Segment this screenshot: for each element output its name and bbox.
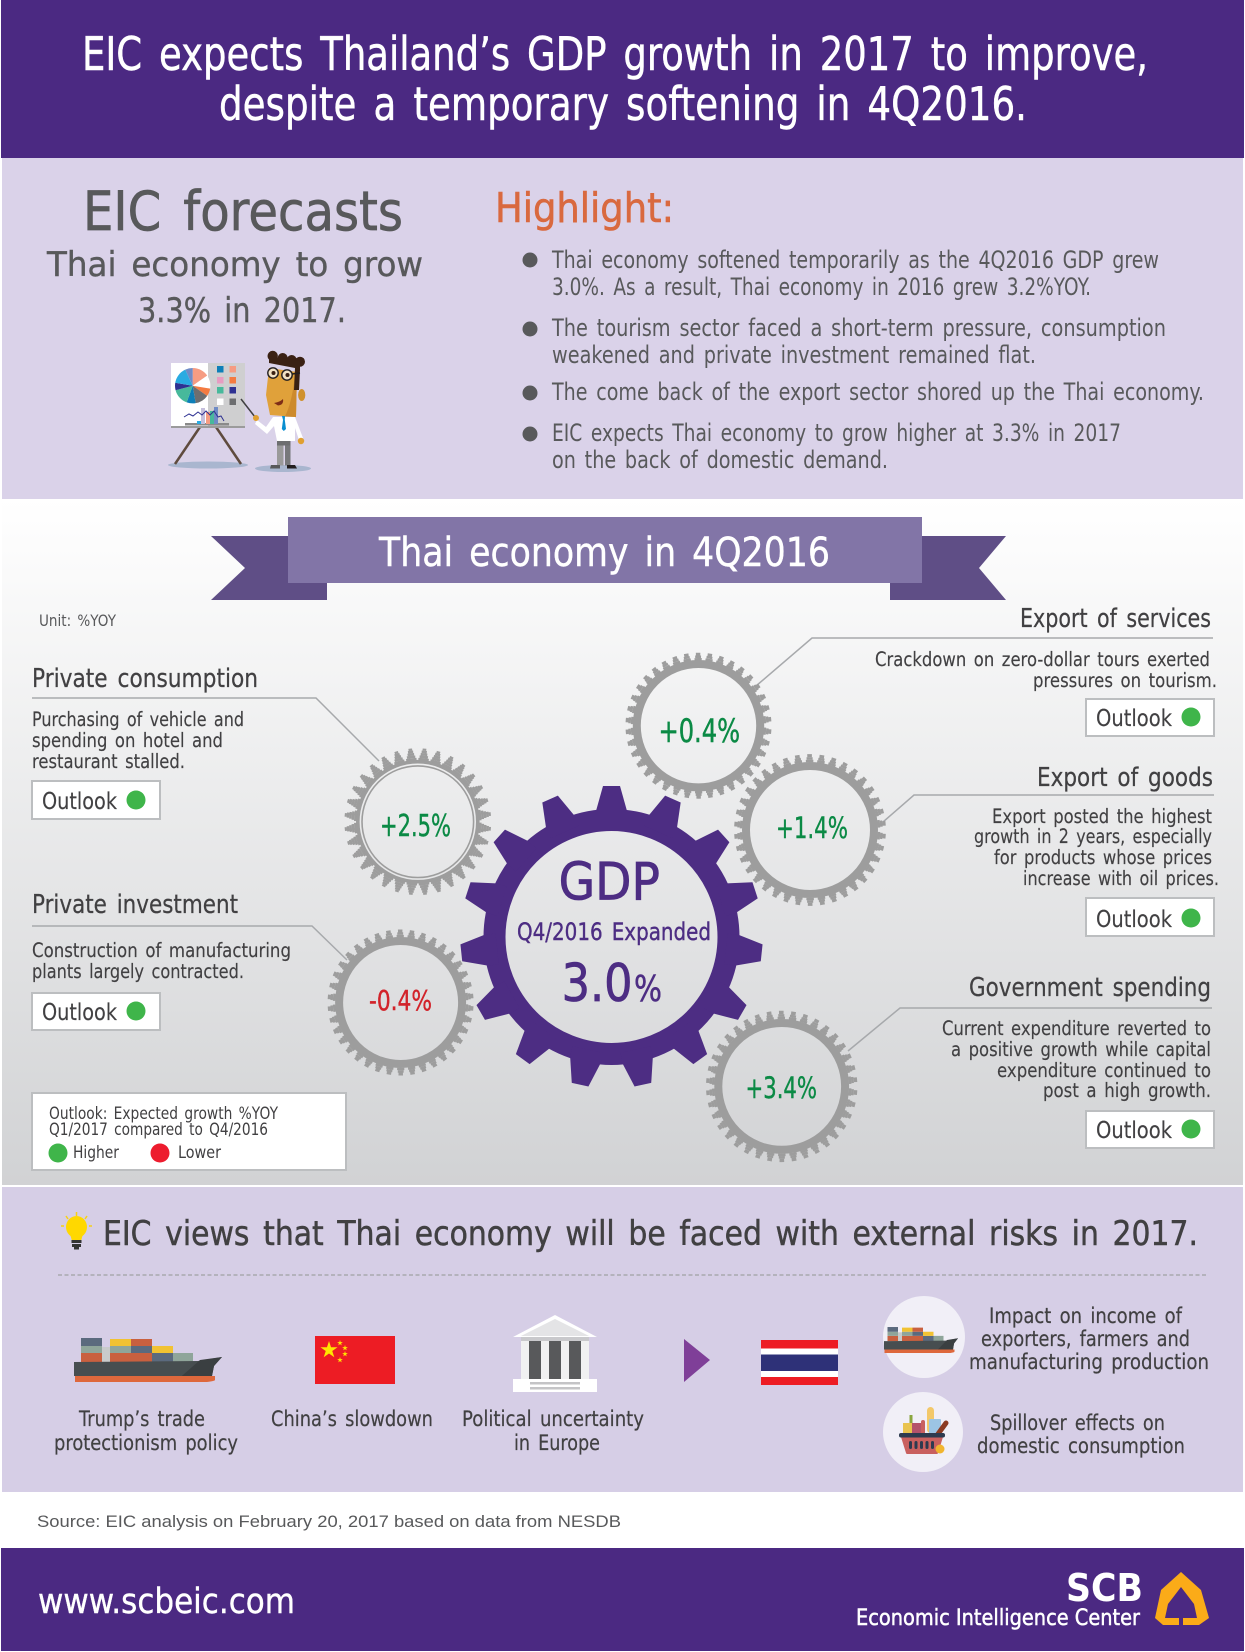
block: private investment: Private investment <box>32 890 238 920</box>
header banner <box>1 0 1244 158</box>
forecast heading: EIC forecasts <box>83 180 403 243</box>
risk labels: protectionism policy <box>54 1431 238 1455</box>
icon: parliament building <box>513 1315 597 1392</box>
panel: Thai economy in 4Q2016 <box>2 499 1243 1185</box>
block: private investment <box>32 890 347 1030</box>
block: private consumption <box>32 664 379 819</box>
risk labels: Trump’s trade <box>78 1407 205 1431</box>
ribbon heading: Thai economy in 4Q2016 <box>378 530 830 576</box>
block: export of services <box>756 604 1217 736</box>
icon: ship in circle <box>883 1296 965 1378</box>
logo: SCB Economic Intelligence Center: Economic Intelligence Center <box>856 1606 1141 1631</box>
small gear: export of services +0.4% <box>627 654 770 797</box>
main gear: GDP 3.0% <box>460 786 763 1088</box>
highlight bullets <box>522 246 1204 474</box>
icon: light bulb <box>61 1212 92 1250</box>
arrow <box>684 1339 710 1382</box>
block: private consumption: restaurant stalled. <box>32 750 185 773</box>
small gear: export of services +0.4%: +0.4% <box>658 712 740 750</box>
legend <box>32 1093 346 1170</box>
text: spillover effects: Spillover effects on <box>990 1411 1165 1435</box>
icon: shopping basket in circle <box>883 1392 963 1472</box>
source note: Source: EIC analysis on February 20, 2017 based on data from NESDB <box>37 1512 621 1531</box>
block: export of goods <box>883 763 1219 936</box>
block: private consumption: Purchasing of vehicle and <box>32 708 244 731</box>
text: spillover effects <box>977 1411 1185 1458</box>
icon: container ship <box>74 1338 222 1382</box>
text: spillover effects: domestic consumption <box>977 1434 1185 1458</box>
small gear: export of goods +1.4% <box>736 756 884 904</box>
block: government spending: expenditure continued to <box>997 1059 1211 1082</box>
small gear: government spending +3.4% <box>708 1012 856 1160</box>
risk labels: China’s slowdown <box>271 1407 433 1431</box>
block: private investment: Outlook <box>42 1000 118 1026</box>
highlight heading: Highlight: <box>495 184 674 232</box>
block: export of services: pressures on tourism. <box>1033 669 1217 692</box>
block: export of services: Outlook <box>1096 706 1173 732</box>
footer bar <box>1 1548 1244 1651</box>
risk labels: Political uncertainty <box>462 1407 644 1431</box>
small gear: export of goods +1.4%: +1.4% <box>776 811 848 845</box>
small gear: private investment -0.4% <box>329 931 472 1074</box>
logo: SCB Economic Intelligence Center: SCB <box>1066 1566 1143 1610</box>
highlight bullets: 3.0%. As a result, Thai economy in 2016 grew 3.2%YOY. <box>552 273 1091 301</box>
main gear: GDP 3.0%: GDP <box>559 853 660 913</box>
block: export of goods: Export of goods <box>1037 763 1213 793</box>
block: private consumption: Private consumption <box>32 664 258 694</box>
highlight bullets: weakened and private investment remained flat. <box>552 341 1036 369</box>
block: private investment: plants largely contracted. <box>32 960 244 983</box>
text: impact on income: manufacturing production <box>969 1350 1209 1374</box>
legend: Lower <box>178 1143 221 1163</box>
text: impact on income <box>969 1304 1209 1374</box>
forecast heading: 3.3% in 2017. <box>138 291 346 331</box>
small gear: private consumption +2.5% <box>346 749 490 894</box>
risk labels <box>54 1407 644 1455</box>
block: private consumption: spending on hotel and <box>32 729 223 752</box>
legend: Higher <box>73 1143 119 1163</box>
small gear: private investment -0.4%: -0.4% <box>369 984 432 1017</box>
icon: Thailand flag <box>761 1340 838 1385</box>
highlight bullets: on the back of domestic demand. <box>552 446 888 474</box>
small gear: government spending +3.4%: +3.4% <box>746 1071 817 1105</box>
forecast heading: Thai economy to grow <box>46 245 423 285</box>
block: government spending: Outlook <box>1096 1118 1173 1144</box>
main gear: GDP 3.0%: 3.0 <box>562 954 633 1014</box>
logo: SCB Economic Intelligence Center <box>856 1566 1209 1631</box>
block: government spending <box>848 973 1214 1148</box>
forecast heading <box>46 180 423 331</box>
legend: Outlook: Expected growth %YOY <box>49 1104 278 1124</box>
title <box>82 27 1148 131</box>
website: www.scbeic.com <box>38 1582 295 1622</box>
block: government spending: post a high growth. <box>1043 1079 1211 1102</box>
text: impact on income: Impact on income of <box>989 1304 1183 1328</box>
icon: presenter with chart board <box>168 351 311 472</box>
small gear: private consumption +2.5%: +2.5% <box>380 809 451 844</box>
panel: external risks <box>2 1187 1243 1492</box>
block: private consumption: Outlook <box>42 789 118 815</box>
block: export of goods: Outlook <box>1096 907 1173 933</box>
title: despite a temporary softening in 4Q2016. <box>219 77 1027 131</box>
unit note: Unit: %YOY <box>39 611 116 630</box>
icon: China flag <box>315 1336 395 1384</box>
ribbon heading <box>211 517 1006 600</box>
block: private investment: Construction of manufacturing <box>32 939 291 962</box>
risk labels: in Europe <box>514 1431 600 1455</box>
main gear: GDP 3.0%: % <box>634 969 662 1010</box>
legend: Q1/2017 compared to Q4/2016 <box>49 1120 268 1140</box>
panel: forecast and highlights <box>2 158 1243 499</box>
text: impact on income: exporters, farmers and <box>981 1327 1190 1351</box>
main gear: GDP 3.0%: Q4/2016 Expanded <box>517 918 711 946</box>
